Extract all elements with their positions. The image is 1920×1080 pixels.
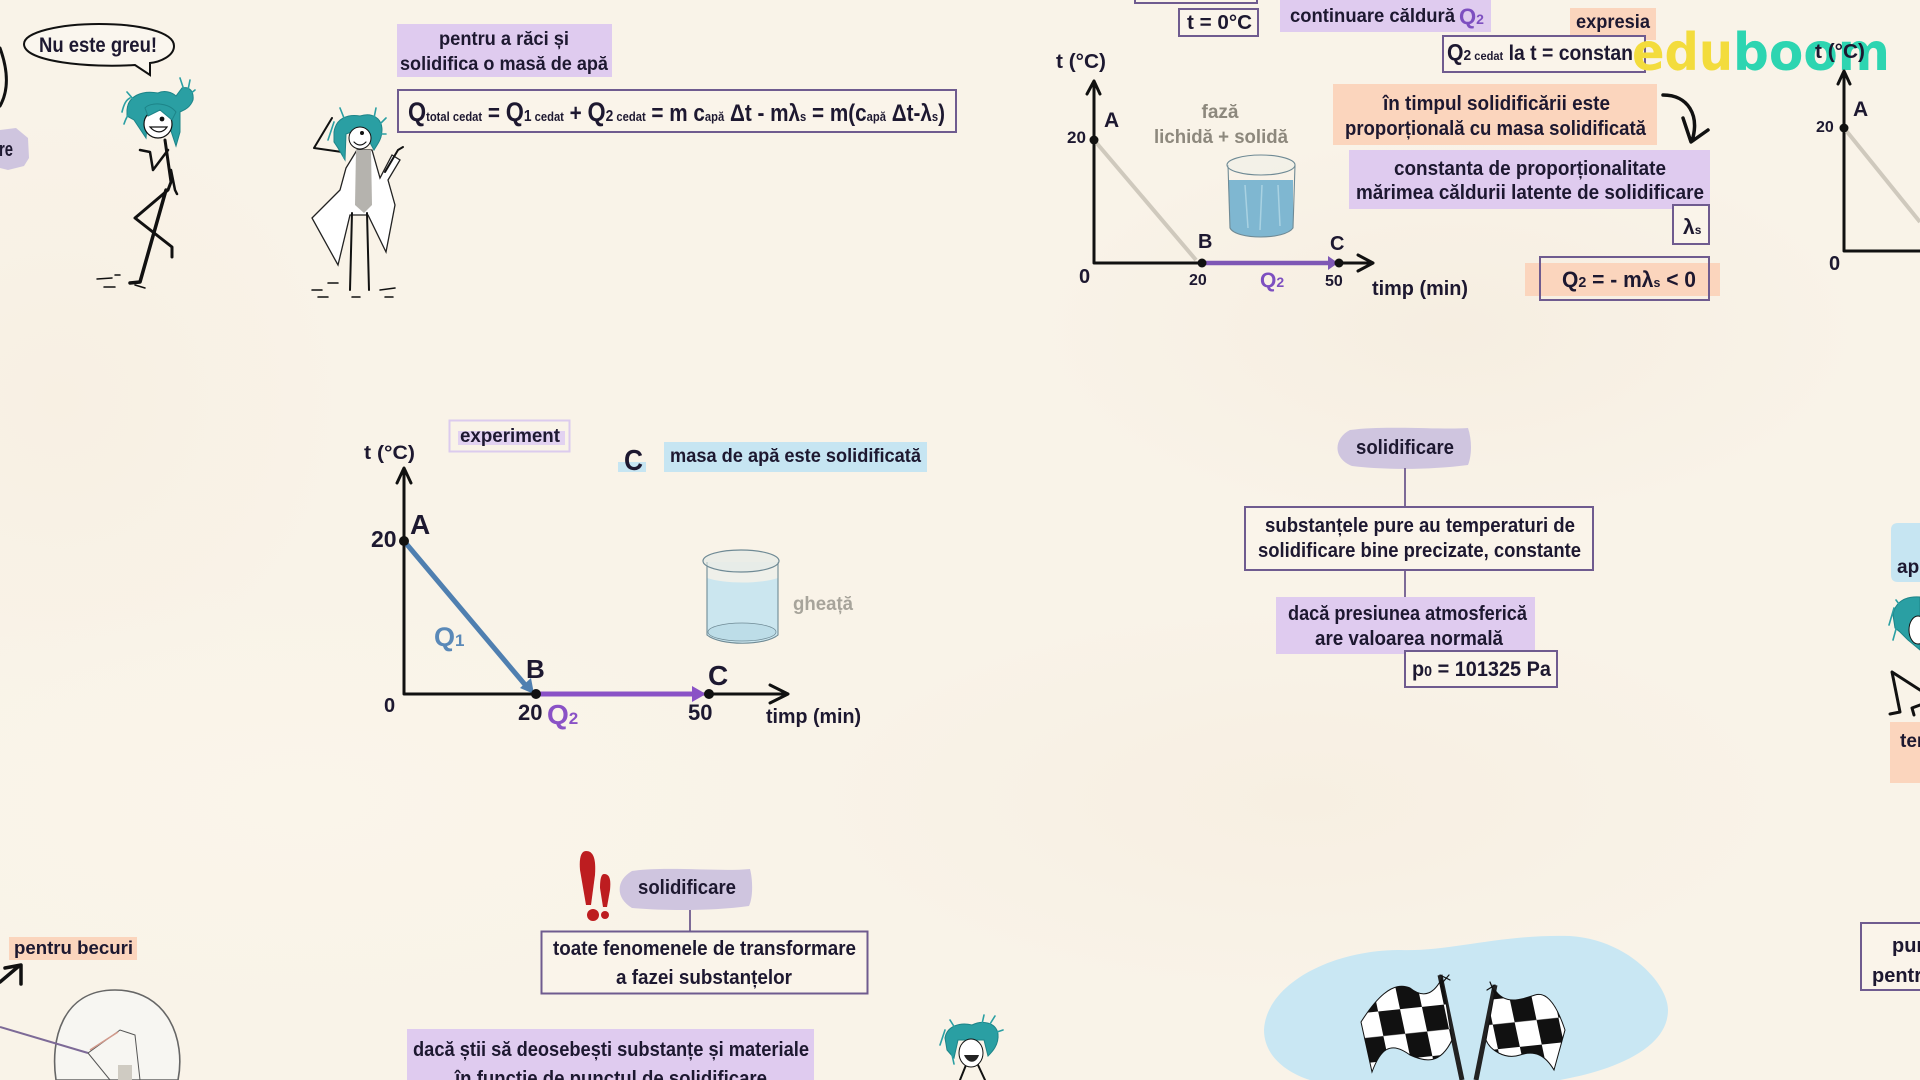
character: bottom girl [940, 1015, 1003, 1080]
callout: continuare căldură Q2: Q2 [1459, 4, 1484, 29]
box fragment: top [1135, 0, 1257, 3]
callout: dacă știi să deosebești: dacă știi să deosebești substanțe și materiale [413, 1039, 809, 1061]
callout: în timpul solidificării: proporțională cu masa solidificată [1345, 118, 1647, 140]
chart: top solidification graph: timp (min) [1372, 278, 1468, 300]
chart: top solidification graph: t (°C) [1056, 51, 1106, 73]
chart: right-edge graph fragment: 0 [1829, 253, 1840, 275]
box: toate fenomenele: toate fenomenele de transformare [553, 938, 856, 960]
chart: top solidification graph: fază [1202, 102, 1239, 123]
tag: pentru becuri: pentru becuri [14, 938, 133, 958]
chart: top solidification graph: Q2 [1260, 269, 1284, 292]
chart: main temperature-time graph: 20 [518, 700, 542, 725]
icon: beaker with ice [703, 550, 779, 643]
icon: light bulb [0, 990, 180, 1080]
chart: right-edge graph fragment: t (°C) [1815, 41, 1865, 63]
chart: top solidification graph: 50 [1325, 273, 1343, 290]
formula: Q2 = -m lambda s < 0: Q2 = - mλs < 0 [1562, 267, 1696, 292]
callout: dacă presiunea atmosferică: dacă presiunea atmosferică [1288, 603, 1528, 625]
left edge fragment: arrow and tag [0, 48, 29, 170]
chart: top solidification graph: 0 [1079, 266, 1090, 288]
callout: constanta de proporționalitate: constanta de proporționalitate [1394, 158, 1666, 180]
chart: main temperature-time graph [364, 443, 861, 730]
formula: Q2 = -m lambda s < 0 [1525, 257, 1720, 300]
label: C with highlight: C [624, 445, 643, 477]
box: toate fenomenele: a fazei substanțelor [616, 967, 792, 989]
arrow: to tag [0, 965, 21, 984]
chart: top solidification graph: C [1330, 233, 1344, 255]
callout: constanta de proporționalitate [1349, 150, 1710, 209]
right edge: box fragment [1861, 923, 1920, 990]
logo: eduboom: edu [1632, 23, 1733, 83]
callout: în timpul solidificării [1333, 84, 1657, 145]
tag: expresia [1570, 8, 1656, 40]
chart: main temperature-time graph: A [410, 509, 430, 540]
chart: main temperature-time graph: Q1 [434, 622, 464, 652]
box: Q2 cedat la t = constant: Q2 cedat la t = constan [1447, 39, 1633, 65]
chart: main temperature-time graph: timp (min) [766, 706, 861, 728]
tag: solidificare (center right) [1338, 428, 1471, 469]
chart: right-edge graph fragment: A [1853, 98, 1868, 121]
box: substanțele pure [1245, 507, 1593, 570]
chart: top solidification graph: 20 [1067, 128, 1086, 147]
callout: în timpul solidificării: în timpul solidificării este [1382, 93, 1610, 115]
arrow: curved down [1663, 95, 1708, 142]
box: substanțele pure: solidificare bine precizate, constante [1258, 540, 1581, 562]
box: lambda s: λs [1683, 216, 1702, 239]
logo: eduboom: boom [1733, 23, 1890, 83]
tag: solidificare (center right): solidificare [1356, 437, 1454, 459]
tag: solidificare (bottom): solidificare [638, 877, 736, 899]
connector: solidificare to box [1404, 468, 1406, 597]
box: t = 0°C: t = 0°C [1187, 12, 1252, 34]
callout: dacă presiunea atmosferică: are valoarea normală [1315, 628, 1504, 650]
icon: checkered flags [1361, 975, 1565, 1080]
connector: solidificare to definition [689, 910, 691, 931]
speech bubble: Nu este greu: Nu este greu! [39, 34, 157, 57]
tag: expresia: expresia [1576, 12, 1650, 33]
callout: constanta de proporționalitate: mărimea căldurii latente de solidificare [1356, 182, 1704, 204]
chart: main temperature-time graph: 50 [688, 700, 712, 725]
chart: top solidification graph: B [1198, 231, 1212, 253]
label: gheață: gheață [793, 594, 853, 615]
callout: pentru a răci: pentru a răci și [439, 29, 569, 50]
box: lambda s [1673, 205, 1709, 244]
chart: main temperature-time graph: 20 [371, 526, 397, 552]
chart: right-edge graph fragment: 20 [1816, 119, 1834, 136]
callout: masa de apă este solidificată: masa de apă este solidificată [670, 446, 921, 467]
right edge: blue callout fragment: ap [1897, 557, 1919, 578]
chart: top solidification graph: A [1104, 109, 1119, 132]
chart: top solidification graph [1056, 51, 1468, 300]
character: walking girl [97, 78, 195, 288]
chart: right-edge graph fragment [1815, 41, 1920, 275]
background shape: blue blob [1264, 936, 1668, 1080]
callout: pentru a răci [397, 24, 612, 77]
chart: main temperature-time graph: t (°C) [364, 443, 415, 464]
box: p0 = 101325 Pa: p0 = 101325 Pa [1412, 658, 1551, 681]
tag: solidificare (bottom) [620, 869, 752, 910]
tag: experiment [450, 420, 570, 452]
right edge: character fragment [1889, 597, 1920, 715]
callout: masa de apă este solidificată [664, 442, 927, 472]
icon: beaker with water and ice [1227, 155, 1295, 237]
callout: dacă presiunea atmosferică [1276, 597, 1535, 654]
chart: top solidification graph: lichidă + solidă [1154, 127, 1288, 148]
box: t = 0°C [1179, 9, 1258, 36]
box: substanțele pure: substanțele pure au temperaturi de [1265, 515, 1575, 537]
chart: main temperature-time graph: C [708, 660, 728, 691]
icon: red exclamation marks [580, 851, 610, 921]
formula: total heat: Qtotal cedat = Q1 cedat + Q2 cedat = m capă Δt - mλs = m(capă Δt-λs) [408, 97, 945, 127]
callout: pentru a răci: solidifica o masă de apă [400, 54, 608, 75]
speech bubble: Nu este greu [24, 24, 174, 75]
chart: main temperature-time graph: Q2 [547, 699, 578, 730]
callout: continuare căldură Q2 [1280, 0, 1491, 32]
chart: top solidification graph: 20 [1189, 272, 1207, 289]
right edge: peach callout fragment [1890, 722, 1920, 783]
chart: main temperature-time graph: 0 [384, 695, 395, 717]
callout: dacă știi să deosebești [407, 1029, 814, 1080]
tag: experiment: experiment [460, 426, 561, 447]
box: p0 = 101325 Pa [1405, 651, 1557, 687]
formula: total heat [398, 90, 956, 132]
logo: eduboom [1632, 23, 1890, 83]
right edge: blue callout fragment [1891, 523, 1920, 582]
character: scientist in lab coat [312, 108, 403, 297]
box: toate fenomenele [542, 932, 868, 994]
chart: main temperature-time graph: B [526, 654, 545, 684]
callout: continuare căldură Q2: continuare căldură [1290, 6, 1455, 27]
